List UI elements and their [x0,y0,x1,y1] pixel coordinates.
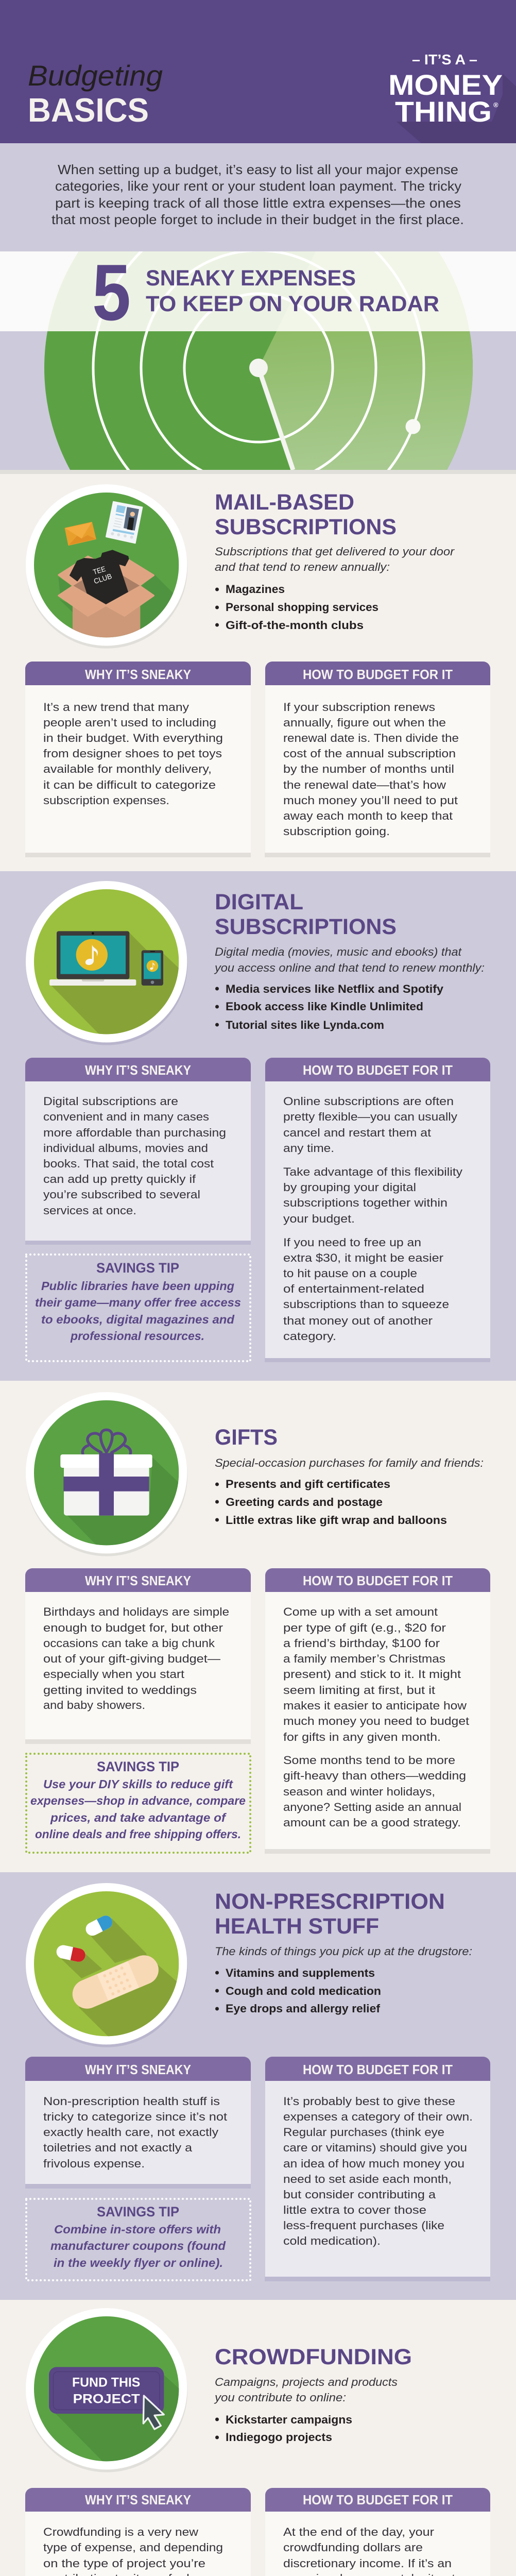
card: how to budget for it: extra $30, it might be easier [283,1251,443,1264]
card: how to budget for it: If you need to free up an [283,1236,421,1249]
card: how to budget for it: cancel and restart them at [283,1126,431,1139]
card: why it's sneaky: exactly health care, not exactly [43,2126,218,2139]
panel: mail-based subscriptions [0,470,516,871]
callout: savings tip [26,1754,250,1853]
description: The kinds of things you pick up at the drugstore: [215,1945,472,1958]
card: how to budget for it: renewal date is. Then divide the [283,732,459,744]
card: why it's sneaky: Digital subscriptions are [43,1095,178,1108]
card: how to budget for it: cold medication). [283,2234,381,2247]
card: why it's sneaky: available for monthly delivery, [43,762,212,775]
bullet list: Media services like Netflix and Spotify [226,982,444,995]
card: how to budget for it [265,1058,490,1362]
card: why it's sneaky: services at once. [43,1204,136,1217]
card: how to budget for it: little extra to cover those [283,2204,426,2216]
description: and that tend to renew annually: [215,561,390,573]
panel: intro: part is keeping track of all those little extra expenses—the ones [55,195,461,211]
card: why it's sneaky: can add up pretty quickly if [43,1173,196,1185]
card: how to budget for it: present) and stick to it. It might [283,1668,461,1681]
card: how to budget for it: away each month to keep that [283,809,453,822]
heading: non-prescription health stuff: HEALTH STUFF [215,1914,379,1939]
logo: It's a Money Thing: – IT’S A – [412,52,477,67]
heading: mail-based subscriptions: MAIL-BASED [215,490,354,515]
card: why it's sneaky: Non-prescription health stuff is [43,2095,220,2108]
heading: 5 sneaky expenses: TO KEEP ON YOUR RADAR [146,292,439,316]
callout: savings tip: to ebooks, digital magazines and [41,1313,235,1326]
card: why it's sneaky: tricky to categorize since it’s not [43,2110,227,2123]
card: why it's sneaky: individual albums, movies and [43,1142,208,1155]
card: how to budget for it: subscriptions together within [283,1196,448,1209]
bullet list [215,982,444,1031]
card: how to budget for it: At the end of the day, your [283,2526,434,2538]
icon: subscription box: TEE [92,565,107,576]
title: Budgeting Basics: Budgeting [28,59,163,92]
card: why it's sneaky: It’s a new trend that many [43,701,189,714]
card: how to budget for it: subscription going. [283,825,390,838]
card: why it's sneaky: on the type of project you’re [43,2557,205,2570]
card: how to budget for it: that money out of another [283,1314,433,1327]
card: why it's sneaky: from designer shoes to pet toys [43,747,222,760]
card: how to budget for it [265,2488,490,2576]
card: how to budget for it [265,2057,490,2281]
bullet list: Eye drops and allergy relief [226,2002,381,2015]
panel: intro: categories, like your rent or your student loan payment. The tricky [55,178,461,194]
card: why it's sneaky [25,2057,251,2189]
card: why it's sneaky: people aren’t used to including [43,716,216,729]
card: why it's sneaky: Birthdays and holidays are simple [43,1605,229,1618]
card: how to budget for it: cost of the annual subscription [283,747,456,760]
card: how to budget for it: If your subscription renews [283,701,435,714]
card: how to budget for it: a family member’s Christmas [283,1652,445,1665]
card: how to budget for it: of entertainment-related [283,1282,424,1295]
bullet list: Little extras like gift wrap and balloons [226,1514,447,1527]
card: why it's sneaky [25,2488,251,2576]
card: how to budget for it: amount can be a good strategy. [283,1816,461,1829]
panel: page header [0,0,516,143]
card: how to budget for it [265,662,490,857]
card: how to budget for it: HOW TO BUDGET FOR IT [303,1062,453,1078]
logo: It's a Money Thing [388,52,516,143]
card: how to budget for it: to hit pause on a couple [283,1267,417,1280]
heading: 5 sneaky expenses: SNEAKY EXPENSES [146,266,356,291]
callout: savings tip: manufacturer coupons (found [50,2239,226,2252]
heading: non-prescription health stuff: NON-PRESCRIPTION [215,1889,445,1914]
callout: savings tip: Public libraries have been upping [41,1279,234,1293]
card: how to budget for it: by grouping your digital [283,1181,416,1194]
card: why it's sneaky: WHY IT’S SNEAKY [85,1573,191,1588]
title: Budgeting Basics [28,59,163,129]
callout: savings tip: SAVINGS TIP [97,2204,179,2219]
card: why it's sneaky: type of expense, and depending [43,2541,223,2554]
callout: savings tip: Use your DIY skills to reduce gift [43,1777,233,1791]
logo: It's a Money Thing: MONEY [388,69,503,101]
panel: digital subscriptions [0,871,516,1381]
card: why it's sneaky [25,1058,251,1245]
heading: 5 sneaky expenses [92,248,439,337]
logo: It's a Money Thing: THING [395,95,492,128]
callout: savings tip: online deals and free shipping offers. [35,1827,241,1841]
card: why it's sneaky: toiletries and not exactly a [43,2141,193,2154]
card: why it's sneaky: and baby showers. [43,1699,145,1711]
card: why it's sneaky: Crowdfunding is a very new [43,2526,198,2538]
panel: radar hero [0,251,516,470]
description: Digital media (movies, music and ebooks) that [215,945,462,958]
card: how to budget for it: pretty flexible—you can usually [283,1110,457,1123]
bullet list [215,2413,352,2444]
card: why it's sneaky: subscription expenses. [43,794,169,807]
card: why it's sneaky [25,662,251,857]
bullet list: Kickstarter campaigns [226,2413,352,2426]
heading: digital subscriptions: DIGITAL [215,890,303,914]
icon: subscription box [26,484,187,649]
panel: intro: When setting up a budget, it’s easy to list all your major expense [58,162,458,177]
panel: crowdfunding [25,2308,490,2576]
card: how to budget for it: anyone? Setting aside an annual [283,1801,461,1814]
bullet list: Magazines [226,583,285,596]
card: how to budget for it: HOW TO BUDGET FOR IT [303,2062,453,2077]
card: how to budget for it: less-frequent purchases (like [283,2219,444,2232]
icon: fund this project button [26,2308,187,2472]
panel: intro [0,143,516,251]
bullet list: Presents and gift certificates [226,1478,390,1490]
card: how to budget for it: HOW TO BUDGET FOR IT [303,1573,453,1588]
card: how to budget for it: Take advantage of this flexibility [283,1165,462,1178]
bullet list: Cough and cold medication [226,1985,381,1997]
card: how to budget for it: for gifts in any given month. [283,1731,441,1743]
card: how to budget for it: any time. [283,1142,334,1155]
card: why it's sneaky: books. That said, the total cost [43,1157,214,1170]
bullet list: Gift-of-the-month clubs [226,619,364,632]
panel: gifts [25,1392,490,1854]
card: how to budget for it: need to set aside each month, [283,2173,452,2185]
card: why it's sneaky: occasions can take a big chunk [43,1637,215,1650]
card: how to budget for it: Online subscriptions are often [283,1095,454,1108]
description: Campaigns, projects and products [215,2376,398,2388]
card: why it's sneaky: WHY IT’S SNEAKY [85,1062,191,1078]
card: how to budget for it: the renewal date—that’s how [283,778,446,791]
bullet list: Tutorial sites like Lynda.com [226,1019,384,1031]
callout: savings tip [26,1255,250,1361]
callout: savings tip: their game—many offer free access [35,1296,241,1309]
heading: digital subscriptions [215,890,397,939]
bullet list: Greeting cards and postage [226,1496,383,1509]
bullet list: Ebook access like Kindle Unlimited [226,1000,423,1013]
callout: savings tip: Combine in-store offers with [54,2223,221,2236]
card: how to budget for it: seem limiting at first, but it [283,1684,435,1697]
card: how to budget for it: HOW TO BUDGET FOR IT [303,667,453,682]
logo: It's a Money Thing: ® [493,101,498,109]
card: how to budget for it: an idea of how much money you [283,2157,465,2170]
description: you contribute to online: [214,2391,346,2404]
card: how to budget for it: crowdfunding dollars are [283,2541,423,2554]
card: why it's sneaky: you’re subscribed to several [43,1188,200,1201]
icon: gift box [26,1392,187,1556]
card: how to budget for it: much money you need to budget [283,1715,469,1727]
panel: intro: that most people forget to include in their budget in the first place. [51,212,464,227]
description [214,945,485,974]
icon: fund this project button: FUND THIS [72,2376,140,2390]
heading: mail-based subscriptions [215,490,397,539]
card: how to budget for it: discretionary income. If it’s an [283,2557,452,2570]
description: Special-occasion purchases for family and friends: [215,1456,484,1469]
card: how to budget for it: annually, figure out when the [283,716,446,729]
bullet list [215,583,379,632]
callout: savings tip: in the weekly flyer or online). [54,2256,223,2269]
card: why it's sneaky: WHY IT’S SNEAKY [85,2062,191,2077]
card: how to budget for it: expenses a category of their own. [283,2110,473,2123]
card: why it's sneaky: WHY IT’S SNEAKY [85,667,191,682]
card: why it's sneaky: WHY IT’S SNEAKY [85,2492,191,2507]
card: how to budget for it: a friend’s birthday, $100 for [283,1637,440,1650]
card: how to budget for it: subscriptions than to squeeze [283,1298,449,1311]
description: Subscriptions that get delivered to your door [215,545,455,558]
bullet list [215,1967,381,2015]
card: why it's sneaky: more affordable than purchasing [43,1126,226,1139]
bullet list: Personal shopping services [226,601,379,614]
bullet list [215,1478,447,1527]
card: why it's sneaky: getting invited to weddings [43,1684,197,1697]
card: how to budget for it: Come up with a set amount [283,1605,438,1618]
title: Budgeting Basics: BASICS [28,91,149,129]
card: why it's sneaky: frivolous expense. [43,2157,145,2170]
card: why it's sneaky: out of your gift-giving budget— [43,1652,220,1665]
bullet list: Vitamins and supplements [226,1967,375,1979]
card: how to budget for it: season and winter holidays, [283,1785,435,1798]
card: why it's sneaky: it can be difficult to categorize [43,778,216,791]
callout: savings tip: SAVINGS TIP [97,1759,179,1774]
callout: savings tip: professional resources. [70,1329,204,1343]
card: how to budget for it: gift-heavy than others—wedding [283,1769,466,1782]
card: how to budget for it: category. [283,1330,336,1343]
heading: crowdfunding: CROWDFUNDING [215,2345,412,2369]
heading: 5 sneaky expenses: 5 [92,248,131,337]
card: how to budget for it: your budget. [283,1212,355,1225]
icon: laptop and phone [26,881,187,1045]
bullet list: Indiegogo projects [226,2431,332,2444]
callout: savings tip: expenses—shop in advance, compare [30,1794,246,1807]
card: why it's sneaky: especially when you start [43,1668,184,1681]
card: how to budget for it: care or vitamins) should give you [283,2141,467,2154]
radar graphic [44,251,473,470]
card: how to budget for it: It’s probably best to give these [283,2095,455,2108]
callout: savings tip: prices, and take advantage of [50,1811,227,1824]
card: how to budget for it: Regular purchases (think eye [283,2126,444,2139]
icon: subscription box: CLUB [93,572,113,585]
description: you access online and that tend to renew monthly: [214,961,485,974]
heading: non-prescription health stuff [215,1889,445,1939]
callout: savings tip: SAVINGS TIP [96,1260,179,1276]
card: how to budget for it: per type of gift (e.g., $20 for [283,1621,446,1634]
card: how to budget for it: by the number of months until [283,762,454,775]
card: why it's sneaky: enough to budget for, but other [43,1621,223,1634]
icon: fund this project button: PROJECT [73,2392,140,2406]
card: how to budget for it: HOW TO BUDGET FOR IT [303,2492,453,2507]
description [214,2376,398,2404]
panel: non-prescription health stuff [0,1872,516,2300]
card: how to budget for it: much money you’ll need to put [283,794,458,807]
card: how to budget for it: makes it easier to anticipate how [283,1699,467,1712]
card: why it's sneaky: in their budget. With everything [43,732,223,744]
icon: pills and bandage [26,1883,187,2047]
card: how to budget for it [265,1568,490,1854]
card: why it's sneaky: convenient and in many cases [43,1110,209,1123]
card: why it's sneaky [25,1568,251,1744]
callout: savings tip [26,2199,250,2280]
card: how to budget for it: but consider contributing a [283,2188,436,2201]
card: how to budget for it: Some months tend to be more [283,1754,455,1767]
heading: digital subscriptions: SUBSCRIPTIONS [215,914,397,939]
heading: mail-based subscriptions: SUBSCRIPTIONS [215,515,397,539]
description [215,545,455,573]
heading: gifts: GIFTS [215,1425,278,1450]
